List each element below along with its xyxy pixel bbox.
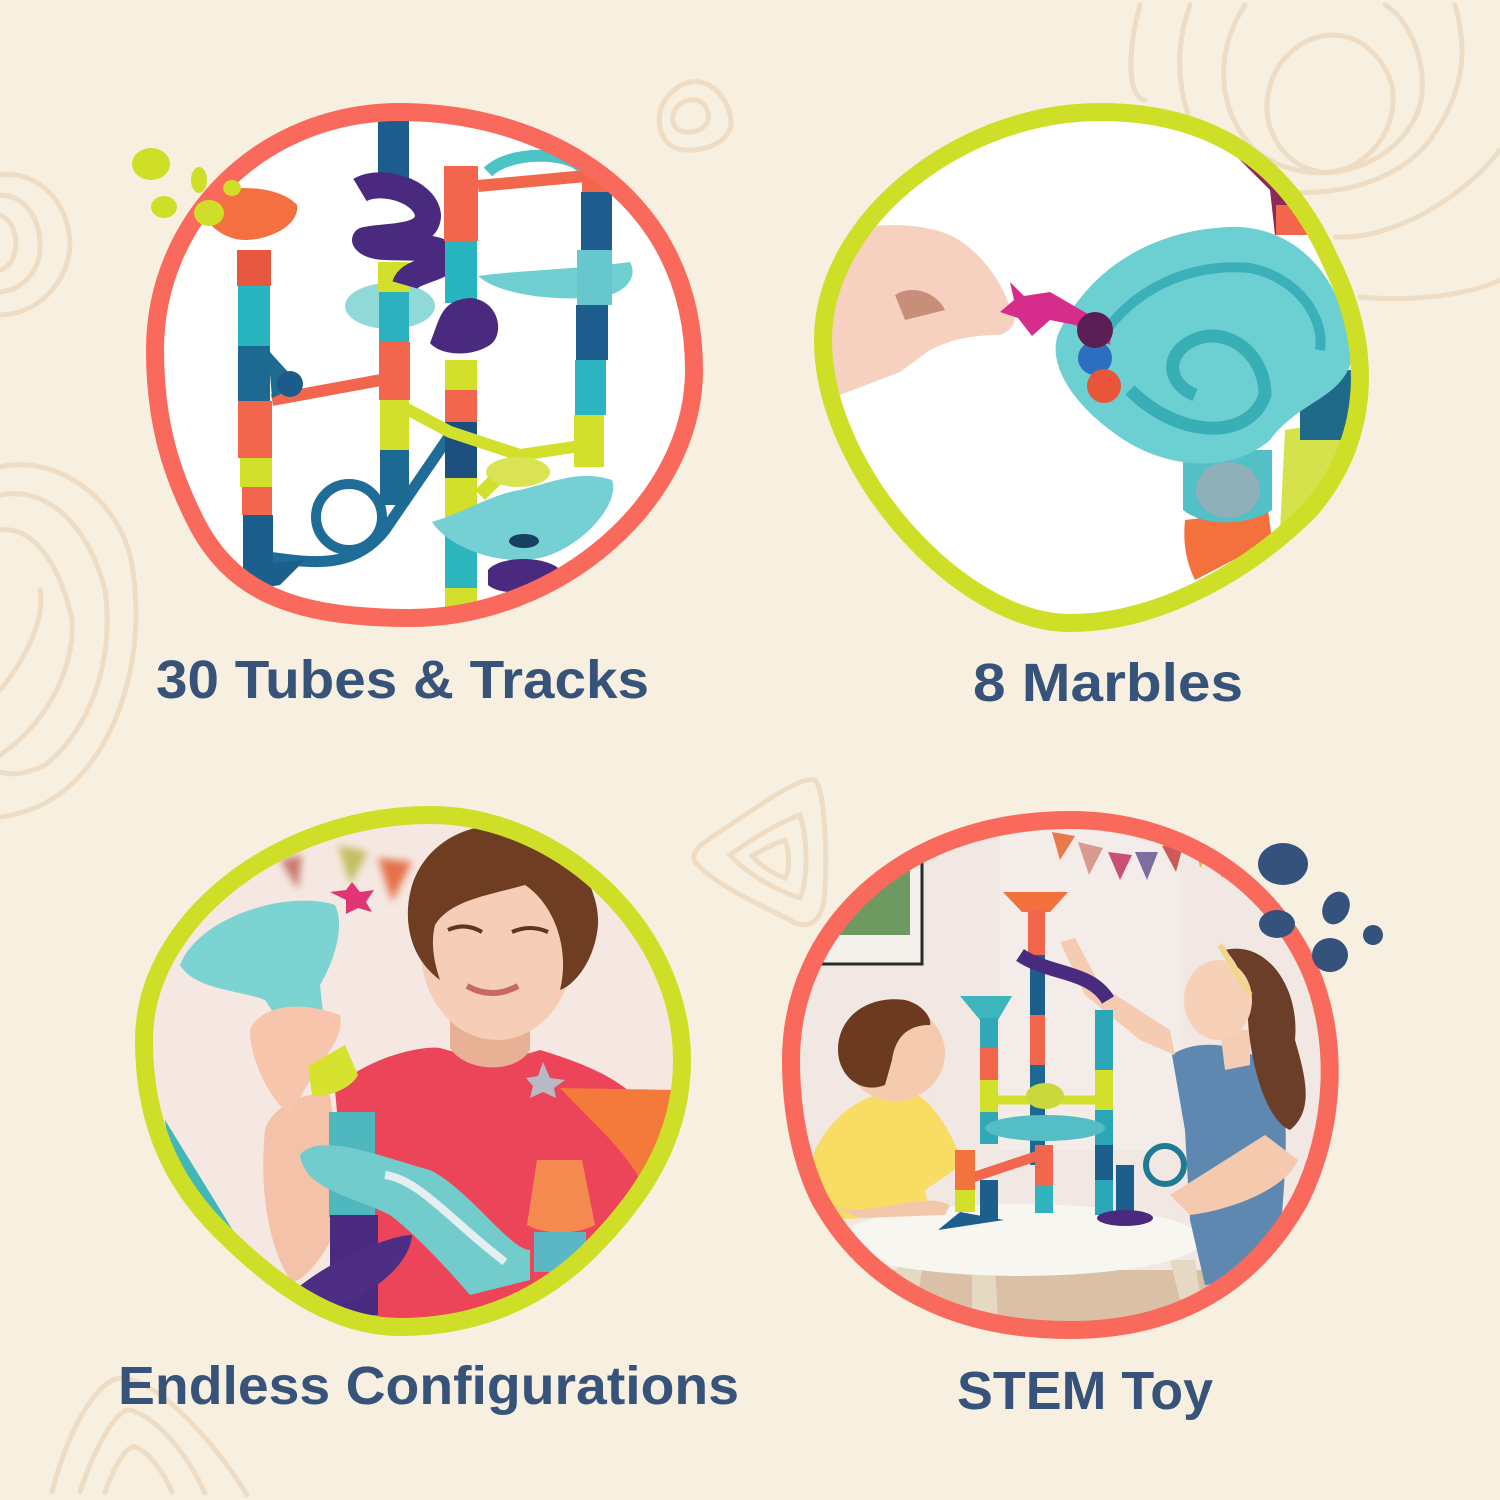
panel: 30 tubes and tracks bbox=[132, 100, 700, 710]
panel: endless configurations bbox=[118, 805, 739, 1416]
blob outline coral bbox=[791, 820, 1330, 1330]
teal fragment left bbox=[165, 1120, 245, 1250]
photo: boy holding funnel bbox=[165, 828, 671, 1318]
label: 8 Marbles: 8 Marbles bbox=[973, 653, 1243, 713]
column C bbox=[444, 166, 478, 608]
purple spiral bbox=[360, 185, 445, 285]
boy body bbox=[810, 1090, 962, 1220]
marbles bbox=[1078, 344, 1112, 375]
girl arm lower bbox=[1170, 1135, 1298, 1215]
shirt bbox=[335, 1048, 660, 1320]
label: Endless Configurations: Endless Configurations bbox=[118, 1356, 739, 1416]
lime character bbox=[486, 457, 550, 487]
navy bracket bbox=[270, 352, 288, 398]
column D bbox=[574, 170, 612, 467]
bunting bbox=[1052, 832, 1232, 880]
orange bowl right bbox=[560, 1088, 675, 1180]
loop track bbox=[258, 438, 448, 562]
blob outline lime bbox=[144, 815, 682, 1327]
eyes and mouth bbox=[448, 926, 548, 932]
column B bbox=[378, 120, 410, 505]
blob outline lime bbox=[823, 112, 1360, 623]
funnel orange bbox=[212, 188, 298, 240]
small star bbox=[526, 1062, 565, 1098]
floor bbox=[785, 1270, 1335, 1340]
teal neck bbox=[1183, 450, 1272, 522]
bunting bbox=[280, 845, 412, 902]
purple spiral bbox=[330, 1215, 378, 1315]
table bbox=[838, 1204, 1202, 1276]
panel: 8 marbles bbox=[810, 100, 1380, 713]
girl face bbox=[1184, 960, 1252, 1040]
photo: children playing at table bbox=[785, 815, 1335, 1340]
teal tube centre bbox=[329, 1112, 375, 1217]
girl hair bbox=[1225, 949, 1306, 1130]
hand bbox=[250, 1007, 341, 1115]
lime tube bbox=[308, 1045, 358, 1096]
teal bowl bbox=[1056, 227, 1352, 463]
lime dots bbox=[132, 148, 241, 226]
arm bbox=[263, 1094, 332, 1282]
purple spiral lower bbox=[430, 298, 498, 353]
red top piece bbox=[1238, 158, 1288, 235]
girl body bbox=[1172, 1045, 1286, 1285]
teal dish bbox=[345, 283, 435, 329]
toy tower bbox=[938, 892, 1184, 1230]
teal tray right bbox=[478, 262, 633, 298]
photo: marble run tower close-up bbox=[164, 121, 685, 609]
bottom bowl bbox=[432, 476, 613, 560]
blob outline coral bbox=[155, 112, 694, 618]
label: STEM Toy: STEM Toy bbox=[957, 1361, 1213, 1421]
pink star bbox=[330, 882, 374, 914]
pink star bbox=[1000, 282, 1112, 345]
teal funnel bbox=[180, 900, 339, 1010]
top rail and teal swirl bbox=[478, 176, 586, 186]
panel: STEM toy bbox=[785, 815, 1383, 1421]
photo: hand with marble bowl bbox=[832, 121, 1351, 614]
column A bbox=[237, 250, 273, 575]
orange tube base bbox=[1184, 510, 1272, 580]
neck and face bbox=[450, 1020, 530, 1068]
orange cup bbox=[527, 1160, 595, 1232]
hair bbox=[408, 825, 598, 990]
label: 30 Tubes & Tracks: 30 Tubes & Tracks bbox=[156, 650, 649, 710]
lime tube bbox=[1280, 428, 1340, 526]
wall picture bbox=[822, 860, 922, 964]
table legs bbox=[890, 1255, 1200, 1320]
hand bbox=[832, 225, 1015, 395]
coral rail left bbox=[272, 378, 392, 400]
navy dots bbox=[1258, 843, 1383, 972]
girl arm bbox=[1060, 938, 1175, 1055]
lime rails bbox=[405, 408, 580, 455]
boy head bbox=[845, 1005, 945, 1101]
